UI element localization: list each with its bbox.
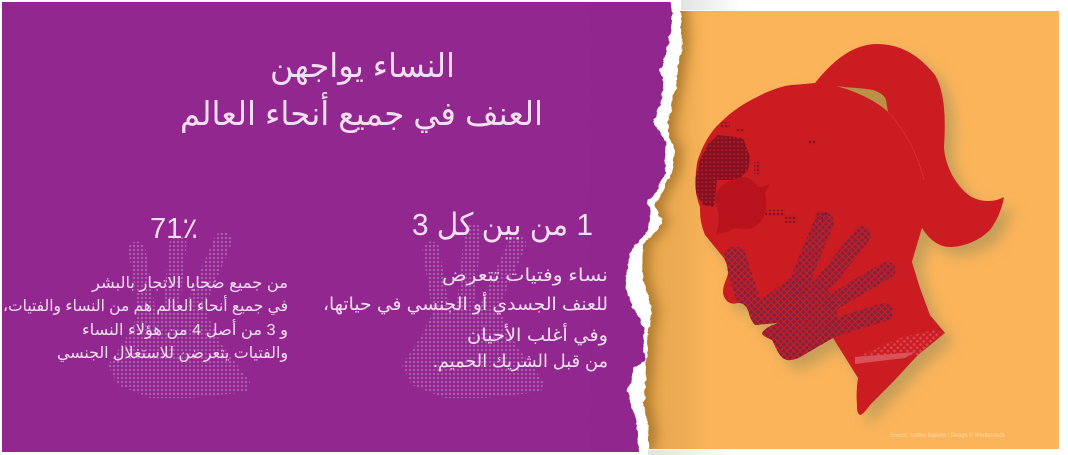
handprint watermark: left [108, 241, 250, 398]
neck light halftone [861, 330, 944, 356]
gap between ponytail and head [836, 86, 888, 112]
statistic: 71 percent: 71٪ [150, 213, 198, 245]
blood splatter [715, 177, 770, 234]
neck light stripe [855, 352, 915, 364]
forehead bruise halftone [692, 135, 750, 207]
title: العنف في جميع أنحاء العالم [180, 92, 543, 133]
head silhouette [695, 44, 1004, 415]
bruises and handprint halftones [692, 122, 948, 364]
text block: one in three women: من قبل الشريك الحميم. [433, 351, 608, 372]
text block: one in three women: نساء وفتيات تتعرض [442, 265, 608, 286]
paper tear shadow on orange [642, 11, 696, 449]
handprint watermark: right [402, 232, 544, 398]
title [180, 47, 543, 133]
text block: one in three women [323, 265, 608, 372]
text block: trafficking victims: في جميع أنحاء العالم هم من النساء والفتيات، [3, 295, 288, 316]
text block: one in three women: وفي أغلب الأحيان [467, 323, 608, 346]
panel: purple torn sheet [2, 0, 673, 455]
title: النساء يواجهن [270, 47, 455, 85]
text block: trafficking victims: والفتيات يتعرضن للاستغلال الجنسي [57, 345, 288, 363]
torn white paper edge [620, 0, 682, 455]
sparse bruise dots [720, 122, 828, 223]
text block: trafficking victims [3, 275, 288, 363]
text block: trafficking victims: و 3 من أصل 4 من هؤلاء النساء [82, 319, 288, 340]
text block: one in three women: للعنف الجسدي أو الجنسي في حياتها، [323, 292, 608, 315]
source credit: Source: United Nations | Design © Shutterstock [890, 432, 1006, 439]
statistic: 1 in 3: 1 من بين كل 3 [412, 207, 593, 243]
text block: trafficking victims: من جميع ضحايا الاتجار بالبشر [91, 275, 288, 293]
panel: orange background [640, 11, 1059, 449]
soft grey page shadows [648, 0, 741, 455]
handprint: thumb and fingers [735, 222, 887, 328]
head contour line [888, 112, 924, 180]
illustration: woman's head in profile [692, 44, 1004, 415]
handprint: palm [749, 278, 840, 360]
